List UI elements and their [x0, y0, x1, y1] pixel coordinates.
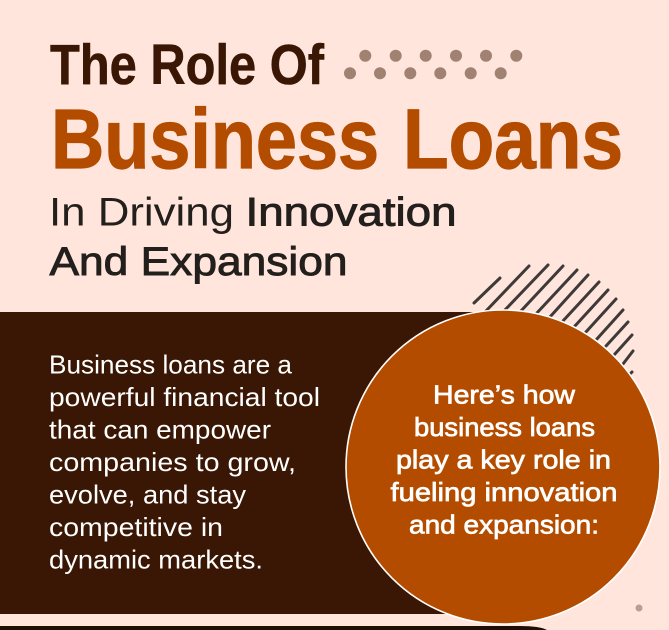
- intro text: evolve, and stay: [49, 480, 246, 510]
- title word: Loans: Loans: [403, 92, 623, 186]
- intro text: competitive in: [49, 512, 223, 542]
- subtitle: Innovation: Innovation: [246, 190, 456, 234]
- subtitle: In Driving: In Driving: [49, 190, 234, 234]
- panel: introduction: [0, 312, 520, 614]
- intro text: Business loans are a: [49, 350, 293, 380]
- intro text: dynamic markets.: [49, 544, 263, 574]
- callout text: [390, 380, 618, 540]
- decorative dots: [344, 50, 522, 79]
- title word: Business: Business: [51, 92, 379, 186]
- title line: The Role Of: The Role Of: [50, 33, 325, 97]
- callout text: and expansion:: [409, 510, 599, 540]
- callout circle: [346, 310, 660, 624]
- intro text: companies to grow,: [49, 447, 296, 477]
- callout text: Here’s how: [433, 380, 575, 410]
- hatched lines behind circle: [474, 265, 633, 374]
- intro text: [49, 350, 320, 574]
- callout text: play a key role in: [396, 444, 611, 474]
- intro text: powerful financial tool: [49, 382, 320, 412]
- subtitle: And Expansion: And Expansion: [50, 240, 347, 284]
- next panel edge: [0, 626, 547, 630]
- callout text: fueling innovation: [390, 477, 618, 507]
- callout text: business loans: [414, 412, 595, 442]
- title: [49, 33, 623, 284]
- intro text: that can empower: [49, 414, 271, 444]
- small dot: [636, 604, 642, 612]
